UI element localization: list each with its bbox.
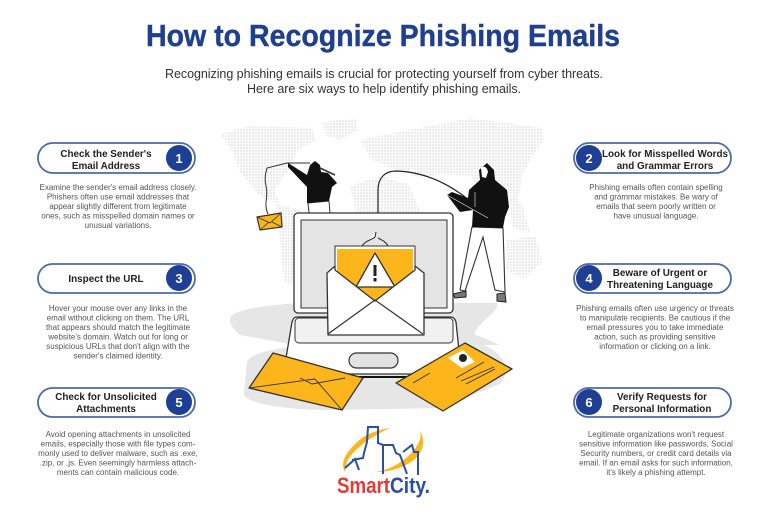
step 1: Email Address [72,161,141,172]
logo: SmartCity [337,427,430,498]
step 5: Avoid opening attachments in unsolicited [46,430,190,439]
laptop [283,213,461,377]
small hacker with rod [265,161,337,214]
step 5: 5 [175,395,183,410]
step 6: 6 [585,395,593,410]
step 5: monly used to deliver malware, such as .exe, [38,449,198,458]
step 4: 4 [585,271,593,286]
step 3: Hover your mouse over any links in the [49,304,188,313]
ground shadows [230,302,506,410]
illustration: phishing hackers and laptop [249,161,512,411]
step 6: Verify Requests for [617,392,707,403]
step 1: Phishers often use email addresses that [47,192,190,202]
title: How to Recognize Phishing Emails [146,18,620,53]
step 6 [574,388,733,477]
yellow postcard [396,343,512,411]
step 2: and grammar mistakes. Be wary of [594,192,719,202]
step 2: emails that seem poorly written or [596,202,716,211]
step 4: Threatening Language [607,280,713,291]
step 3: 3 [175,271,183,286]
step 1: Check the Sender's [60,149,152,160]
step 3 [38,264,195,360]
step 6: Personal Information [613,404,711,415]
step 1: appear slightly different from legitimate [49,202,187,211]
yellow envelope [249,353,363,410]
intro text: Here are six ways to help identify phishing emails. [247,82,521,96]
step 5 [38,388,198,477]
step 5: Attachments [76,404,136,415]
step 3: that appears should match the legitimate [46,323,191,332]
step 3: email without clicking on them. The URL [47,314,190,322]
step 2: 2 [585,151,593,166]
step 4 [574,264,734,351]
step 5: Check for Unsolicited [55,392,157,403]
step 4: Phishing emails often use urgency or threats [576,304,734,313]
intro text: Recognizing phishing emails is crucial for protecting yourself from cyber threats. [165,67,603,81]
step 2: have unusual language. [614,212,698,220]
step 6: email. If an email asks for such information, [579,458,733,468]
logo: SmartCity: City. [390,473,430,498]
step 6: Security numbers, or credit card details via [580,449,732,458]
step 2: and Grammar Errors [617,161,714,172]
step 3: sender's claimed identity. [74,352,162,360]
yellow warning letter [335,246,415,306]
step 4: action, such as providing sensitive [594,332,716,342]
step 4: information or clicking on a link. [599,342,711,351]
step 3: website's domain. Watch out for long or [47,332,188,342]
logo: SmartCity: Smart [337,473,391,498]
world map [220,118,544,284]
step 4: to manipulate recipients. Be cautious if the [580,314,731,322]
step 3: suspicious URLs that don't align with the [46,342,190,351]
step 2 [574,143,731,220]
step 3: Inspect the URL [68,274,144,285]
front envelope [327,266,424,335]
intro text [165,67,603,96]
step 6: sensitive information like passwords, Social [579,440,733,448]
step 6: Legitimate organizations won't request [588,430,725,439]
step 4: email pressures you to take immediate [587,323,724,332]
large hacker with rod [378,163,509,302]
step 2: Look for Misspelled Words [602,149,729,160]
step 1: unusual variations. [85,221,151,230]
step 1: ones, such as misspelled domain names or [41,212,195,220]
step 1: 1 [175,151,183,166]
step 1: Examine the sender's email address closely. [39,183,197,192]
step 5: .zip, or .js. Even seemingly harmless attach- [40,458,197,468]
hook [362,232,388,246]
step 2: Phishing emails often contain spelling [589,183,723,192]
step 6: it's likely a phishing attempt. [606,468,706,477]
step 4: Beware of Urgent or [613,268,707,279]
small envelope on line [257,213,282,230]
step 5: ments can contain malicious code. [57,468,179,477]
step 1 [38,143,197,230]
step 5: emails, especially those with file types com- [41,440,196,448]
